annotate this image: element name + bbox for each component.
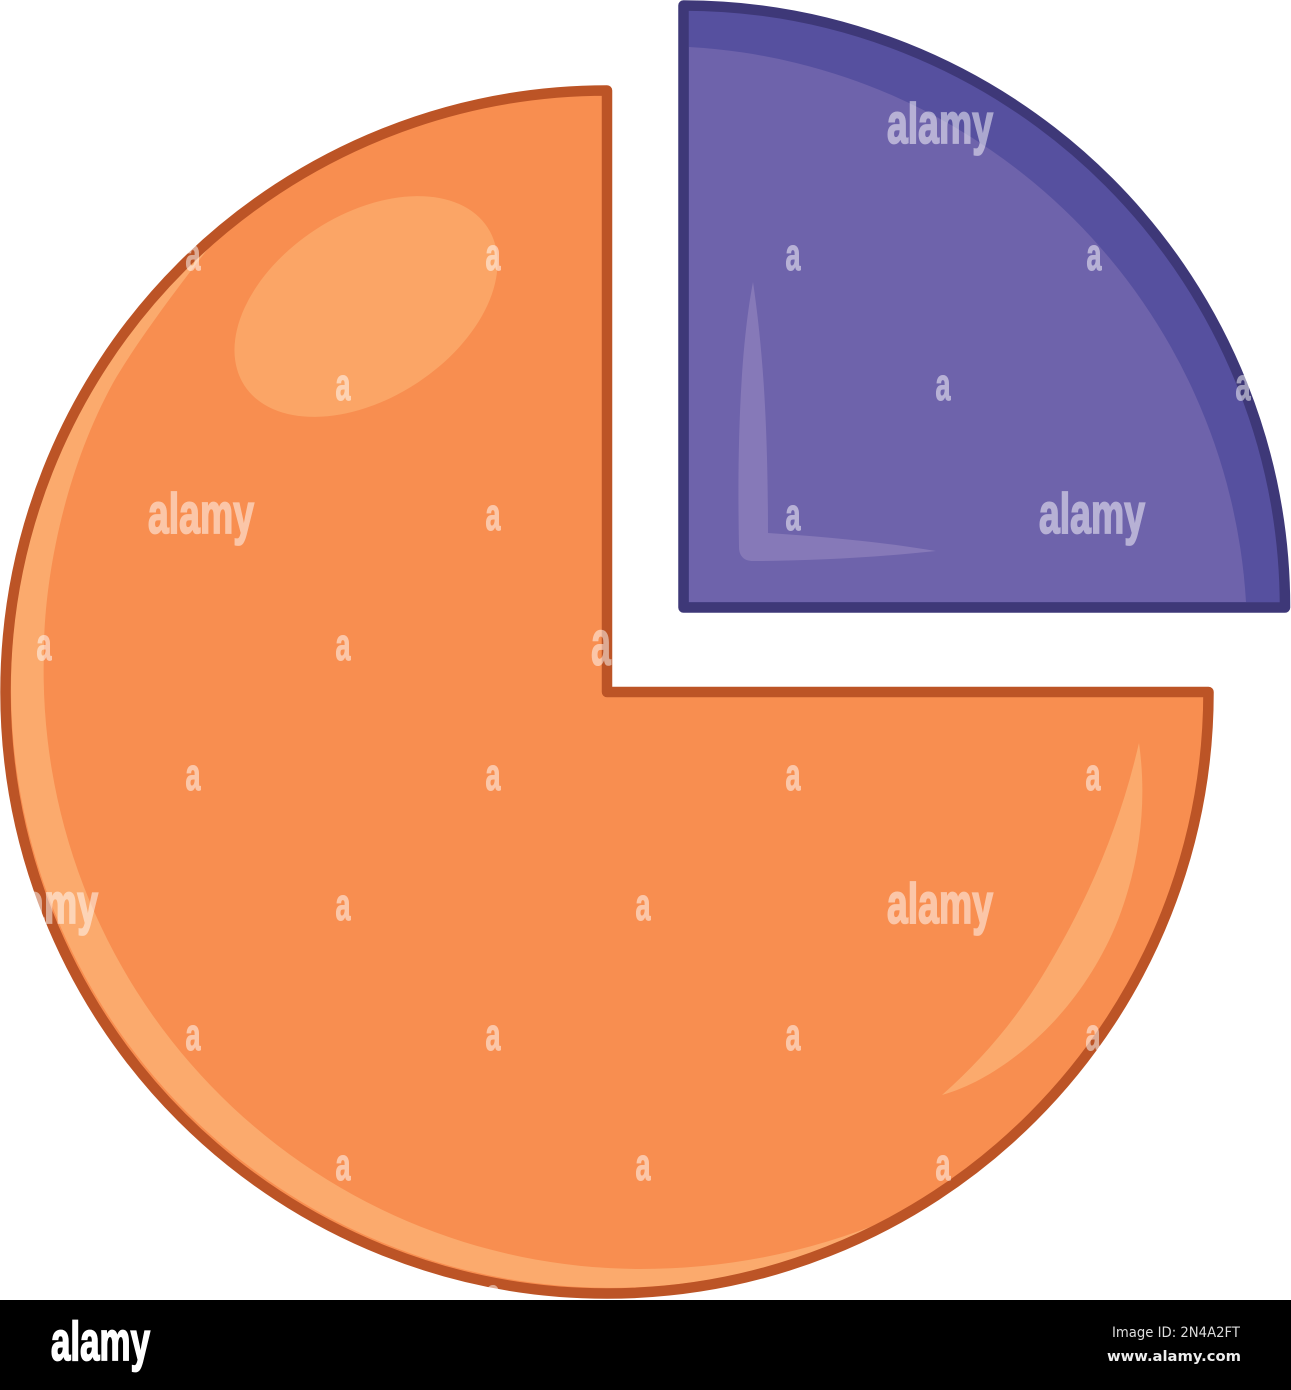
watermark small marks: a bbox=[486, 1269, 501, 1320]
footer bar bbox=[0, 1300, 1291, 1390]
purple inner lighter area bbox=[689, 47, 1246, 602]
watermark small marks: a bbox=[336, 1139, 351, 1190]
watermark small marks: a bbox=[36, 619, 52, 670]
watermark text: alamy bbox=[887, 872, 993, 936]
orange left rim highlight bbox=[11, 231, 890, 1288]
watermark small marks: a bbox=[186, 749, 201, 800]
watermark small marks: a bbox=[186, 229, 201, 280]
watermark small marks: a bbox=[186, 1009, 201, 1060]
watermark small marks bbox=[36, 229, 1251, 1320]
watermark small marks: a bbox=[486, 489, 501, 540]
watermark small marks: a bbox=[936, 1139, 951, 1190]
watermark small marks: a bbox=[1086, 229, 1102, 280]
footer logo: alamy bbox=[51, 1310, 150, 1372]
watermark small marks: a bbox=[336, 879, 351, 930]
watermark text: alamy bbox=[887, 92, 993, 156]
watermark small marks: a bbox=[486, 749, 501, 800]
watermark small marks: a bbox=[591, 607, 611, 679]
orange top oval highlight bbox=[194, 150, 538, 463]
watermark small marks: a bbox=[786, 749, 801, 800]
purple slice: one quarter bbox=[684, 6, 1285, 608]
watermark small marks: a bbox=[636, 879, 651, 930]
watermark small marks: a bbox=[486, 1009, 501, 1060]
watermark small marks: a bbox=[1086, 749, 1101, 800]
watermark small marks: a bbox=[336, 359, 351, 410]
watermark small marks: a bbox=[636, 1139, 651, 1190]
watermark text: alamy bbox=[148, 482, 254, 546]
watermark small marks: a bbox=[786, 489, 801, 540]
purple L shaped highlight bbox=[738, 282, 936, 561]
watermark small marks: a bbox=[786, 229, 801, 280]
watermark text bbox=[0, 92, 1145, 936]
watermark small marks: a bbox=[786, 1009, 801, 1060]
watermark small marks: a bbox=[1086, 1009, 1101, 1060]
watermark small marks: a bbox=[336, 619, 351, 670]
watermark small marks: a bbox=[936, 359, 951, 410]
watermark small marks: a bbox=[1236, 359, 1251, 410]
watermark small marks: a bbox=[486, 229, 501, 280]
watermark text: alamy bbox=[1039, 482, 1145, 546]
orange right crescent highlight bbox=[942, 743, 1142, 1095]
image id: Image ID: 2N4A2FT bbox=[1112, 1325, 1240, 1341]
website: www.alamy.com bbox=[1107, 1349, 1241, 1365]
